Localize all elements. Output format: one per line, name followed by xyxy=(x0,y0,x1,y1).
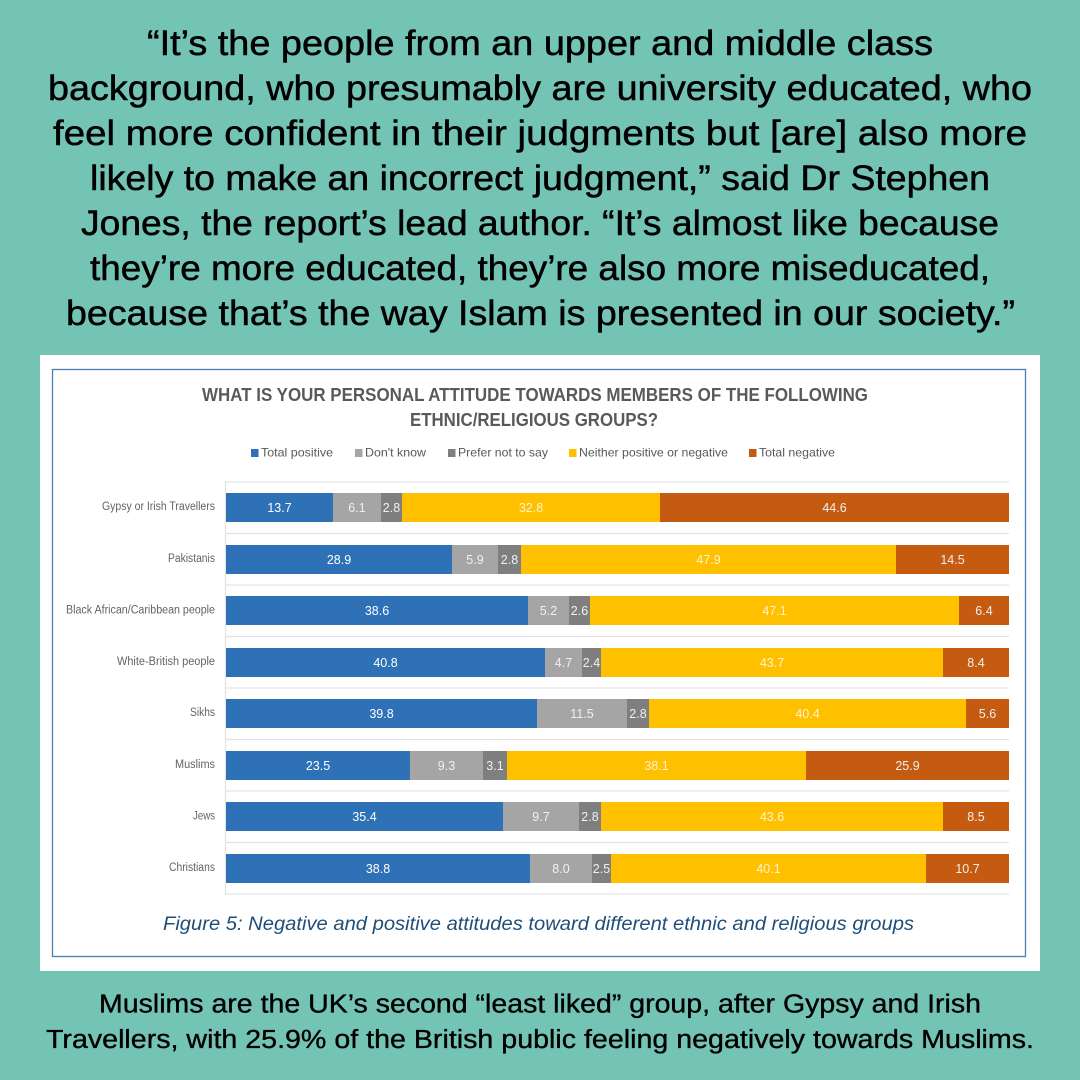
row: Muslims: 38.1 xyxy=(644,759,669,773)
stacked bar chart xyxy=(66,481,1009,895)
row: Sikhs: 39.8 xyxy=(369,707,394,721)
panel: chart card xyxy=(40,355,1040,971)
row: Sikhs: Sikhs xyxy=(190,707,215,719)
row: Christians: 40.1 xyxy=(756,862,781,876)
row: Black African/Caribbean people: 6.4 xyxy=(975,604,993,618)
row: Gypsy or Irish Travellers: 13.7 xyxy=(267,501,292,515)
quote text: likely to make an incorrect judgment,” said Dr Stephen xyxy=(90,159,990,198)
row: White-British people xyxy=(117,648,1009,677)
legend xyxy=(251,446,835,460)
row: Sikhs: 11.5 xyxy=(570,707,594,721)
bottom summary text: Travellers, with 25.9% of the British public feeling negatively towards Muslims. xyxy=(46,1026,1034,1054)
row: White-British people: 8.4 xyxy=(967,656,985,670)
row: White-British people: White-British people xyxy=(117,656,215,668)
figure caption: Figure 5: Negative and positive attitudes toward different ethnic and religious groups xyxy=(163,914,915,935)
chart title xyxy=(202,385,868,430)
quote text xyxy=(48,24,1032,333)
row: Pakistanis: 5.9 xyxy=(466,553,484,567)
row: Jews: 43.6 xyxy=(760,810,784,824)
row: White-British people: 40.8 xyxy=(373,656,398,670)
row: Pakistanis: 14.5 xyxy=(940,553,965,567)
legend: Total positive xyxy=(261,446,333,460)
row: Christians: 2.5 xyxy=(593,862,610,876)
row: Sikhs: 40.4 xyxy=(795,707,820,721)
quote text: background, who presumably are university educated, who xyxy=(48,69,1032,108)
bottom summary text xyxy=(46,990,1034,1054)
row: Muslims: 9.3 xyxy=(438,759,455,773)
row: Muslims xyxy=(175,751,1009,780)
row: Gypsy or Irish Travellers: Gypsy or Irish Travellers xyxy=(102,501,215,513)
row: Pakistanis: 28.9 xyxy=(327,553,351,567)
row: Jews: 35.4 xyxy=(352,810,377,824)
row: Gypsy or Irish Travellers xyxy=(102,493,1009,522)
row: Christians: Christians xyxy=(169,862,215,874)
row: Black African/Caribbean people: Black African/Caribbean people xyxy=(66,604,215,616)
row: Jews: Jews xyxy=(193,810,215,822)
row: Jews: 2.8 xyxy=(581,810,599,824)
row: White-British people: 4.7 xyxy=(555,656,572,670)
quote text: Jones, the report’s lead author. “It’s almost like because xyxy=(81,204,999,243)
row: White-British people: 43.7 xyxy=(760,656,784,670)
row: Black African/Caribbean people: 5.2 xyxy=(540,604,557,618)
row: Pakistanis: 2.8 xyxy=(501,553,518,567)
row: Pakistanis xyxy=(168,545,1009,574)
row: Gypsy or Irish Travellers: 44.6 xyxy=(822,501,847,515)
quote text: because that’s the way Islam is presented in our society.” xyxy=(66,294,1015,333)
row: Gypsy or Irish Travellers: 6.1 xyxy=(348,501,366,515)
chart title: ETHNIC/RELIGIOUS GROUPS? xyxy=(410,410,658,430)
bottom summary text: Muslims are the UK’s second “least liked” group, after Gypsy and Irish xyxy=(99,990,981,1018)
row: Black African/Caribbean people: 38.6 xyxy=(365,604,389,618)
row: Black African/Caribbean people xyxy=(66,596,1009,625)
row: Sikhs: 2.8 xyxy=(629,707,647,721)
row: Gypsy or Irish Travellers: 32.8 xyxy=(519,501,543,515)
row: Christians xyxy=(169,854,1009,883)
row: Muslims: 23.5 xyxy=(306,759,330,773)
row: Christians: 38.8 xyxy=(366,862,390,876)
row: White-British people: 2.4 xyxy=(583,656,600,670)
row: Jews: 8.5 xyxy=(967,810,985,824)
row: Christians: 10.7 xyxy=(955,862,980,876)
row: Muslims: Muslims xyxy=(175,759,215,771)
row: Jews: 9.7 xyxy=(532,810,550,824)
row: Jews xyxy=(193,802,1009,831)
row: Sikhs: 5.6 xyxy=(979,707,996,721)
legend: Total negative xyxy=(759,446,835,460)
row: Muslims: 3.1 xyxy=(486,759,504,773)
row: Christians: 8.0 xyxy=(552,862,570,876)
row: Black African/Caribbean people: 47.1 xyxy=(762,604,787,618)
row: Black African/Caribbean people: 2.6 xyxy=(571,604,588,618)
legend: Neither positive or negative xyxy=(579,446,728,460)
quote text: “It’s the people from an upper and middle class xyxy=(147,24,933,63)
row: Sikhs xyxy=(190,699,1009,728)
row: Muslims: 25.9 xyxy=(895,759,920,773)
quote text: they’re more educated, they’re also more miseducated, xyxy=(90,249,990,288)
row: Gypsy or Irish Travellers: 2.8 xyxy=(383,501,400,515)
legend: Don't know xyxy=(365,446,426,460)
chart title: WHAT IS YOUR PERSONAL ATTITUDE TOWARDS MEMBERS OF THE FOLLOWING xyxy=(202,385,868,405)
legend: Prefer not to say xyxy=(458,446,548,460)
row: Pakistanis: 47.9 xyxy=(696,553,721,567)
quote text: feel more confident in their judgments but [are] also more xyxy=(53,114,1027,153)
row: Pakistanis: Pakistanis xyxy=(168,553,215,565)
